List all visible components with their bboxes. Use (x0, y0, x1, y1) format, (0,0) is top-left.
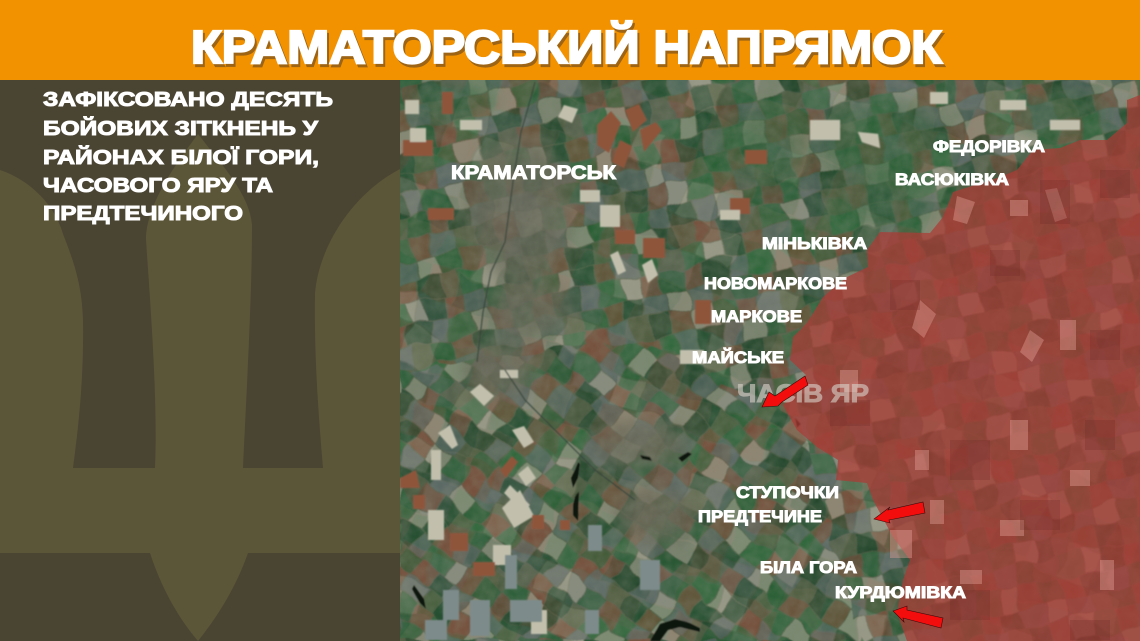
summary text (43, 89, 333, 225)
map label: Маркове: МАРКОВЕ (711, 308, 802, 326)
summary text: ЗАФІКСОВАНО ДЕСЯТЬ (43, 89, 333, 111)
specific fields: north-west (403, 92, 767, 324)
summary text: БОЙОВИХ ЗІТКНЕНЬ У (43, 116, 319, 140)
map label: Краматорськ: КРАМАТОРСЬК (451, 163, 616, 184)
map label: Часів Яр: ЧАСІВ ЯР (737, 380, 869, 408)
urban areas and large-scale tones (405, 80, 1110, 545)
summary text: ЧАСОВОГО ЯРУ ТА (43, 175, 273, 197)
map label: Ступочки: СТУПОЧКИ (736, 484, 839, 502)
map label: Курдюмівка: КУРДЮМІВКА (835, 584, 966, 602)
map label: Біла Гора: БІЛА ГОРА (760, 559, 857, 577)
field mosaic (380, 60, 1140, 641)
specific fields: south-west (428, 384, 547, 634)
water bodies (412, 418, 801, 641)
river line (477, 82, 635, 500)
arrow: Часів Яр (762, 376, 808, 407)
map: satellite base with fields (380, 60, 1140, 641)
title: КРАМАТОРСЬКИЙ НАПРЯМОК (193, 24, 945, 76)
texture mottling (400, 80, 1140, 641)
occupied area overlay (783, 95, 1140, 641)
summary text: РАЙОНАХ БІЛОЇ ГОРИ, (43, 145, 319, 169)
arrow: Курдюмівка (893, 606, 943, 628)
map label: Майське: МАЙСЬКЕ (692, 348, 784, 367)
icon: trident emblem (0, 134, 400, 641)
header band (0, 0, 1140, 80)
map label: Предтечине: ПРЕДТЕЧИНЕ (698, 508, 822, 526)
map label: Міньківка: МІНЬКІВКА (762, 235, 867, 253)
map label: Васюківка: ВАСЮКІВКА (895, 171, 1009, 189)
arrow: Предтечине (874, 502, 925, 523)
panel: left sidebar with trident (0, 80, 400, 641)
occupied area lighter fields (840, 188, 1114, 590)
summary text: ПРЕДТЕЧИНОГО (43, 203, 243, 225)
map label: Новомаркове: НОВОМАРКОВЕ (704, 275, 847, 293)
title: КРАМАТОРСЬКИЙ НАПРЯМОК (191, 21, 943, 73)
map label: Федорівка: ФЕДОРІВКА (933, 138, 1045, 156)
